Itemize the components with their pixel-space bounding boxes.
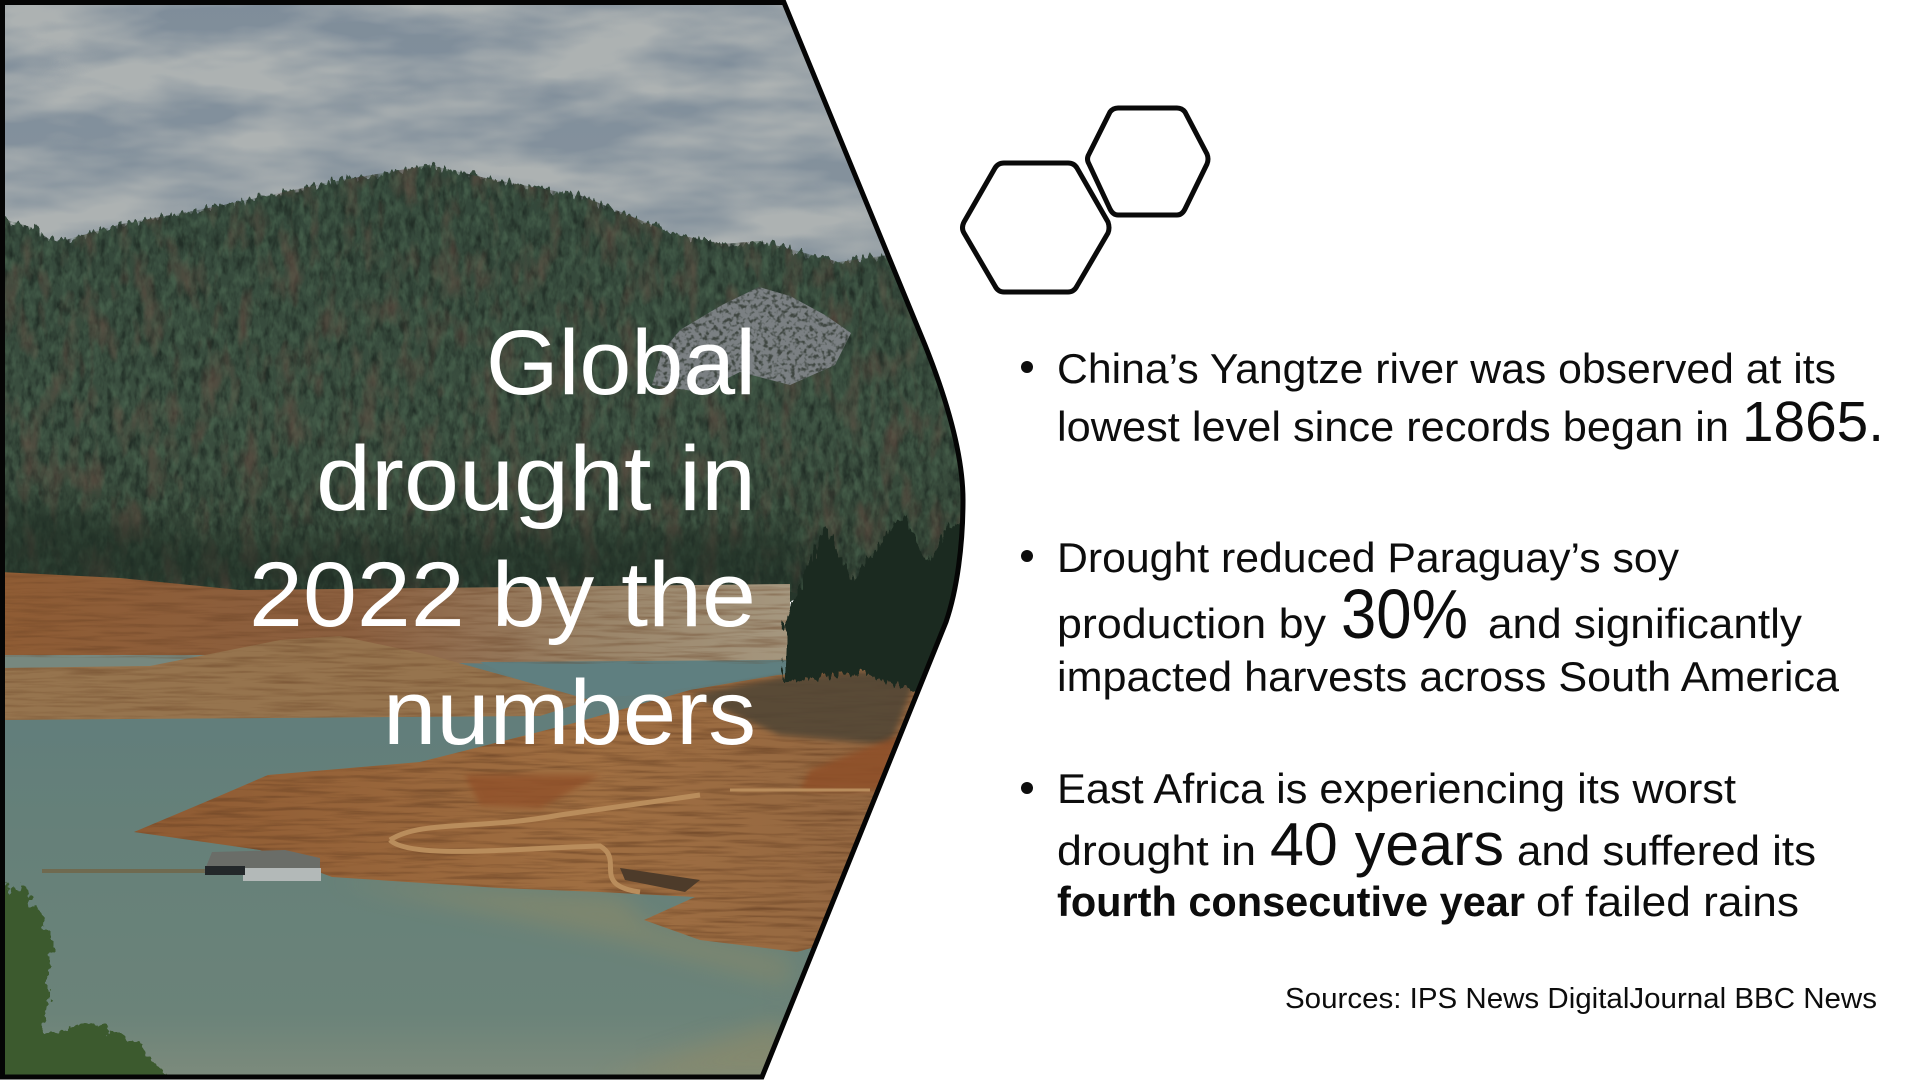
photo forest hillside [0, 165, 980, 640]
bullet: East Africa: fourth consecutive year [1057, 878, 1525, 925]
bullet: Yangtze river: lowest level since records began in [1057, 403, 1729, 450]
bullet: East Africa: East Africa is experiencing its worst [1057, 765, 1736, 812]
bullet: East Africa: 40 years [1270, 811, 1504, 878]
photo bank soil texture [0, 570, 800, 720]
bullet: East Africa: drought in [1057, 827, 1256, 874]
sources: Sources: IPS News DigitalJournal BBC News [1285, 983, 1877, 1015]
title: 2022 by the [249, 544, 756, 646]
photo main lake [5, 663, 861, 1074]
bullet: Yangtze river: 1865. [1742, 390, 1884, 454]
title: Global [486, 312, 756, 414]
bullet: Paraguay soy: production by [1057, 600, 1326, 647]
bullet: East Africa: of failed rains [1536, 878, 1799, 925]
photo foreground tree [0, 888, 180, 1080]
bullet: Yangtze river [1021, 345, 1884, 454]
photo shoreline trees [784, 515, 975, 695]
photo sky [5, 5, 886, 264]
photo tan shoreline shallows [406, 884, 788, 1074]
panel outline [2, 2, 963, 1077]
photo exposed far bank [0, 572, 790, 664]
bullet: Paraguay soy: Drought reduced Paraguay’s soy [1057, 534, 1679, 581]
title: numbers [383, 662, 756, 764]
bullet: Paraguay soy: 30% [1341, 575, 1468, 653]
bullet: Paraguay soy: and significantly [1488, 600, 1802, 647]
title: drought in [316, 428, 756, 530]
panel: drought lake photo [0, 0, 980, 1080]
icon: two hexagons [962, 108, 1208, 292]
photo island [0, 636, 590, 720]
photo peninsula shore [134, 668, 915, 952]
photo houseboat [42, 850, 321, 881]
bullet: East Africa: and suffered its [1517, 827, 1816, 874]
bullet: Yangtze river: China’s Yangtze river was observed at its [1057, 345, 1836, 392]
bullet: Paraguay soy: impacted harvests across South America [1057, 653, 1840, 700]
bullet: East Africa [1021, 765, 1816, 925]
bullet: Paraguay soy [1021, 534, 1840, 700]
photo far water [5, 655, 786, 668]
title [249, 312, 756, 764]
